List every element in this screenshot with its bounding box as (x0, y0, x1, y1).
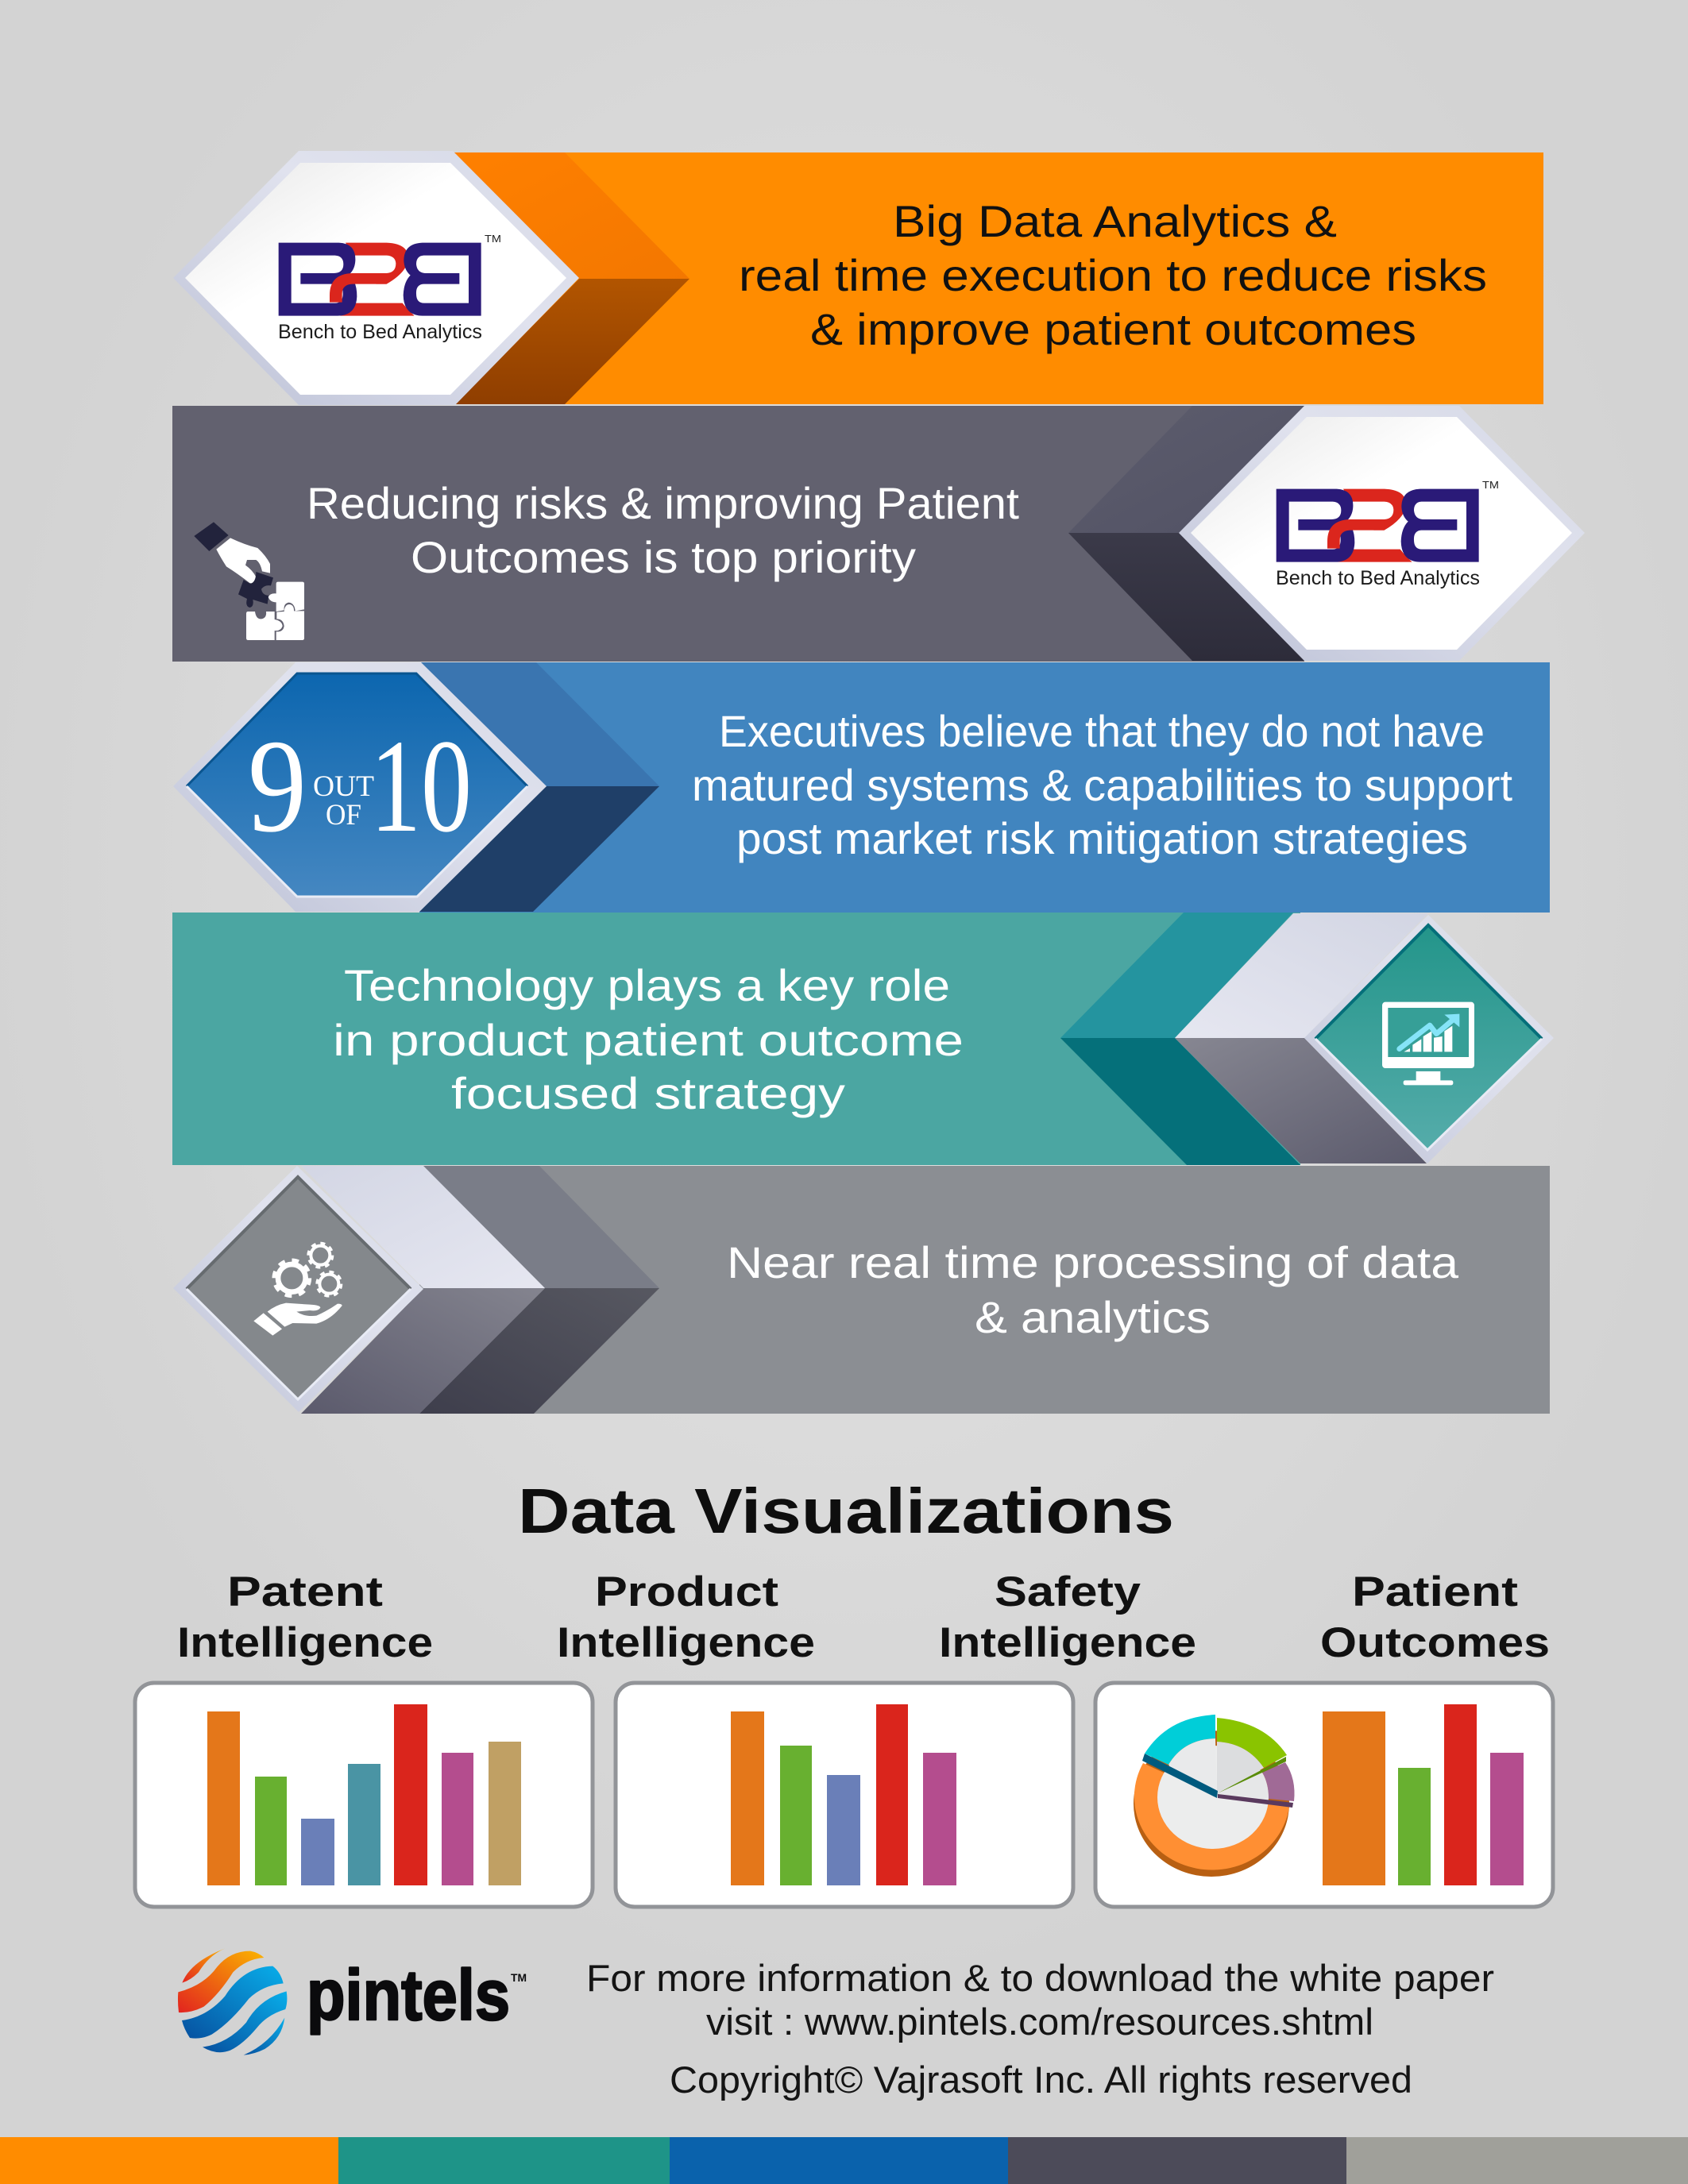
text block: Reducing risks & improving Patient (307, 478, 1019, 528)
panel: near real time processing (173, 1166, 1550, 1414)
chevron: orange fold (453, 152, 689, 404)
logo: Bench to Bed Analytics: TM (1482, 479, 1499, 491)
subheading: Safety Intelligence: Safety (995, 1569, 1141, 1615)
subheading: Product Intelligence (557, 1569, 815, 1666)
statistic: 9 out of 10 (248, 712, 472, 860)
subheading: Safety Intelligence: Intelligence (939, 1619, 1196, 1666)
text block: & analytics (975, 1292, 1211, 1342)
statistic: 9 out of 10: OF (326, 799, 361, 832)
text block (307, 478, 1019, 582)
chevron: silver fold (1175, 913, 1428, 1163)
text block (739, 196, 1487, 354)
icon: globe (178, 1948, 287, 2055)
text block: Outcomes is top priority (411, 532, 916, 582)
logo: pintels: TM (511, 1971, 527, 1984)
chart: product intelligence bars (616, 1683, 1073, 1907)
subheading: Safety Intelligence (939, 1569, 1196, 1666)
subheading: Patient Outcomes (1320, 1569, 1550, 1666)
statistic: 9 out of 10: OUT (313, 770, 374, 803)
logo: Bench to Bed Analytics: TM (485, 233, 501, 245)
chart: patent intelligence bars (135, 1683, 593, 1907)
panel: big data analytics (173, 151, 1543, 405)
subheading: Patient Outcomes: Patient (1352, 1569, 1518, 1615)
text block: real time execution to reduce risks (739, 250, 1487, 300)
logo: Bench to Bed Analytics: Bench to Bed Analytics (278, 321, 482, 343)
text block: Near real time processing of data (727, 1237, 1459, 1287)
text block: in product patient outcome (333, 1015, 964, 1065)
subheading: Patent Intelligence: Intelligence (177, 1619, 433, 1666)
logo: Bench to Bed Analytics (1276, 479, 1499, 589)
footer text: For more information & to download the white paper (586, 1957, 1494, 1999)
heading: Data Visualizations: Data Visualizations (518, 1476, 1174, 1546)
footer text: visit : www.pintels.com/resources.shtml (706, 2001, 1373, 2043)
text block: Technology plays a key role (344, 960, 950, 1010)
hexagon: logo badge (1179, 406, 1585, 661)
text block: focused strategy (451, 1068, 845, 1118)
footer text: Copyright© Vajrasoft Inc. All rights reserved (670, 2059, 1412, 2101)
panel: technology plays a key role (172, 913, 1554, 1165)
chart: patient outcomes pie and bars (1095, 1683, 1553, 1907)
text block: matured systems & capabilities to support (692, 760, 1512, 810)
donut chart (1134, 1715, 1295, 1877)
chevron: gray fold (419, 1166, 659, 1414)
subheading: Product Intelligence: Intelligence (557, 1619, 815, 1666)
colour strip (0, 2137, 1688, 2184)
text block: Big Data Analytics & (893, 196, 1337, 246)
text block (727, 1237, 1459, 1342)
hexagon: statistic badge (173, 662, 547, 912)
chevron: gray fold (1068, 406, 1304, 661)
chevron: silver fold (301, 1166, 545, 1414)
text block: Executives believe that they do not have (719, 706, 1485, 756)
statistic: 9 out of 10: 10 (370, 712, 472, 860)
footer text (586, 1957, 1494, 2101)
subheading: Product Intelligence: Product (595, 1569, 778, 1615)
text block (692, 706, 1512, 863)
icon: monitor with rising chart (1382, 1002, 1474, 1085)
text block: & improve patient outcomes (810, 304, 1416, 354)
logo: Bench to Bed Analytics (278, 233, 501, 343)
chevron: blue fold (419, 662, 659, 912)
subheading: Patent Intelligence (177, 1569, 433, 1666)
logo: pintels (178, 1948, 527, 2055)
panel: reducing risks (172, 406, 1585, 662)
statistic: 9 out of 10: 9 (248, 712, 307, 860)
text block (333, 960, 964, 1118)
diamond: monitor badge (1304, 915, 1554, 1163)
text block: post market risk mitigation strategies (736, 813, 1468, 863)
diamond: gears badge (173, 1166, 423, 1412)
subheading: Patent Intelligence: Patent (227, 1569, 383, 1615)
panel: 9 out of 10 executives (173, 662, 1550, 913)
icon: hand placing puzzle piece (194, 522, 304, 640)
subheading: Patient Outcomes: Outcomes (1320, 1619, 1550, 1666)
chevron: teal fold (1060, 913, 1300, 1165)
logo: pintels: pintels (307, 1956, 510, 2035)
hexagon: logo badge (173, 151, 579, 405)
icon: gears over open hand (253, 1243, 342, 1336)
logo: Bench to Bed Analytics: Bench to Bed Analytics (1276, 567, 1480, 589)
